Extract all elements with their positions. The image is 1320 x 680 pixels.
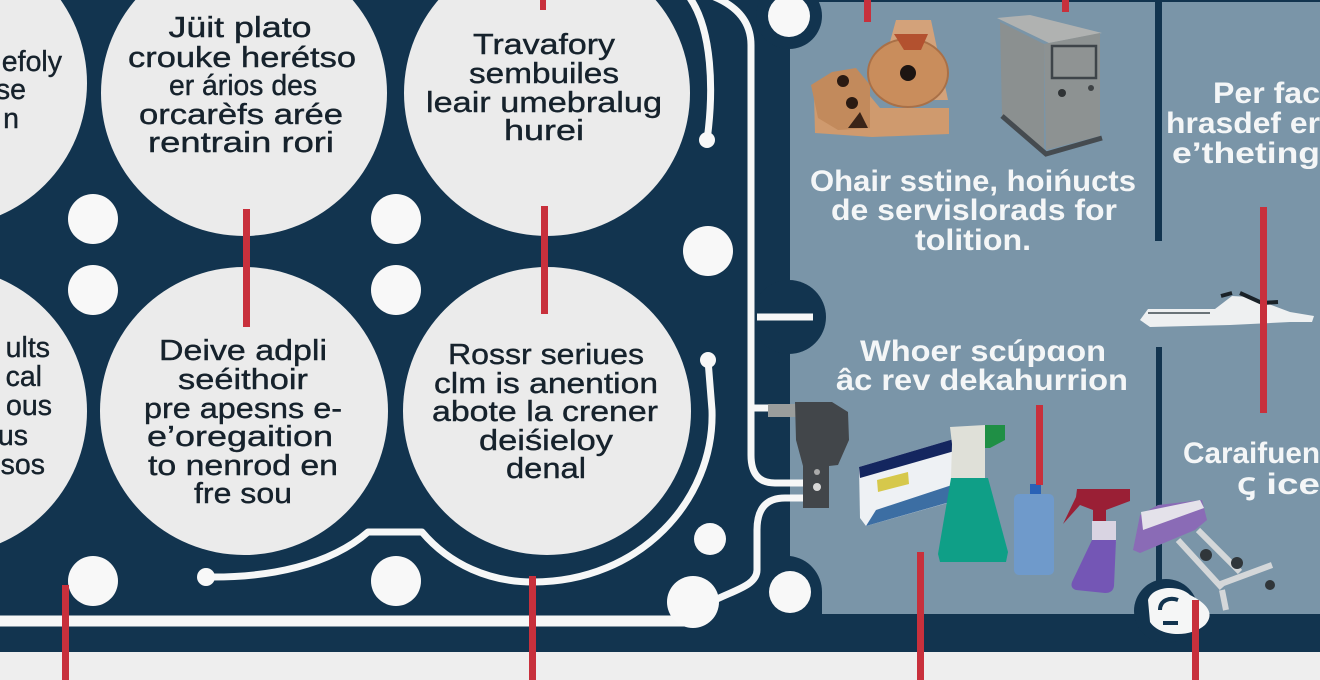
text: panel middle caption: Whoer scúpɑon: [860, 335, 1106, 368]
node: bottom-left partial circle: ous: [6, 390, 52, 422]
node: bottom-right circle: [403, 267, 691, 555]
node: bottom-right circle: deiśieloy: [479, 425, 614, 457]
icon: purple spray bottle: [1063, 489, 1130, 593]
white connector dots: [68, 0, 811, 628]
text: panel middle caption: âc rev dekahurrion: [836, 364, 1128, 397]
icon: green spray bottle: [938, 425, 1008, 562]
node: top-middle circle: Jüit plato: [168, 12, 312, 44]
text: panel lower right caption: Caraifuen: [1183, 437, 1320, 470]
text: panel right caption: Per fac: [1213, 77, 1320, 110]
text: panel middle caption: [836, 335, 1128, 397]
text: panel right caption: [1166, 77, 1320, 170]
node: bottom-left partial circle: [0, 267, 87, 555]
node: bottom-middle circle: pre apesns e-: [144, 393, 342, 425]
icon: dark connector bracket: [768, 402, 849, 508]
node: bottom-middle circle: e’oregaition: [147, 421, 333, 453]
node: bottom-right circle: clm is anention: [434, 368, 658, 400]
node: bottom-left partial circle: ults: [6, 332, 50, 364]
node: top-middle circle: [101, 0, 387, 236]
node: top-left partial circle: n: [3, 103, 19, 135]
icon: white clasp: [1148, 588, 1210, 634]
node: top-right circle: Travafory: [473, 29, 616, 61]
node: top-middle circle: rentrain rori: [148, 127, 334, 159]
icon: flat white tool: [1140, 293, 1314, 327]
node: bottom-middle circle: fre sou: [194, 478, 292, 510]
node: bottom-right circle: denal: [506, 453, 586, 485]
node: top-right circle: hurei: [504, 115, 584, 147]
node: top-left partial circle: [0, 0, 87, 227]
icon: wooden machine parts: [811, 20, 949, 137]
text: panel top caption: tolition.: [915, 224, 1031, 257]
panel: slate products area: [752, 0, 1320, 643]
node: top-middle circle: crouke herétso: [128, 42, 356, 74]
node: top-right circle: sembuiles: [469, 58, 619, 90]
node: top-left partial circle: efoly: [2, 46, 63, 78]
text: panel right caption: e’theting: [1172, 137, 1320, 170]
node: bottom-middle circle: [100, 267, 388, 555]
footer band: [0, 652, 1320, 680]
white circuit lines: [0, 0, 813, 621]
icon: blue bottle: [1014, 484, 1054, 575]
node: bottom-left partial circle: cal: [6, 361, 42, 393]
text: panel lower right caption: [1183, 437, 1320, 501]
text: panel top caption: Ohair sstine, hoińucts: [810, 165, 1136, 198]
icon: product box: [859, 438, 958, 526]
icon: purple walker: [1133, 500, 1275, 610]
icon: grey cabinet: [997, 15, 1102, 154]
node: bottom-middle circle: to nenrod en: [148, 450, 338, 482]
node: top-right circle: [404, 0, 690, 236]
text: panel top caption: de servislorads for: [831, 194, 1117, 227]
node: bottom-middle circle: seéithoir: [178, 364, 309, 396]
node: top-middle circle: er ários des: [169, 70, 317, 102]
node: bottom-left partial circle: sos: [1, 449, 45, 481]
node: top-right circle: leair umebralug: [426, 87, 662, 119]
node: bottom-right circle: Rossr seriues: [448, 339, 644, 371]
text: panel lower right caption: ꞔ ice: [1237, 468, 1320, 501]
text: panel right caption: hrasdef er: [1166, 107, 1320, 140]
node: bottom-middle circle: Deive adpli: [159, 335, 327, 367]
text: panel top caption: [810, 165, 1136, 257]
node: bottom-right circle: abote la crener: [432, 396, 659, 428]
node: top-middle circle: orcarèfs arée: [139, 99, 343, 131]
